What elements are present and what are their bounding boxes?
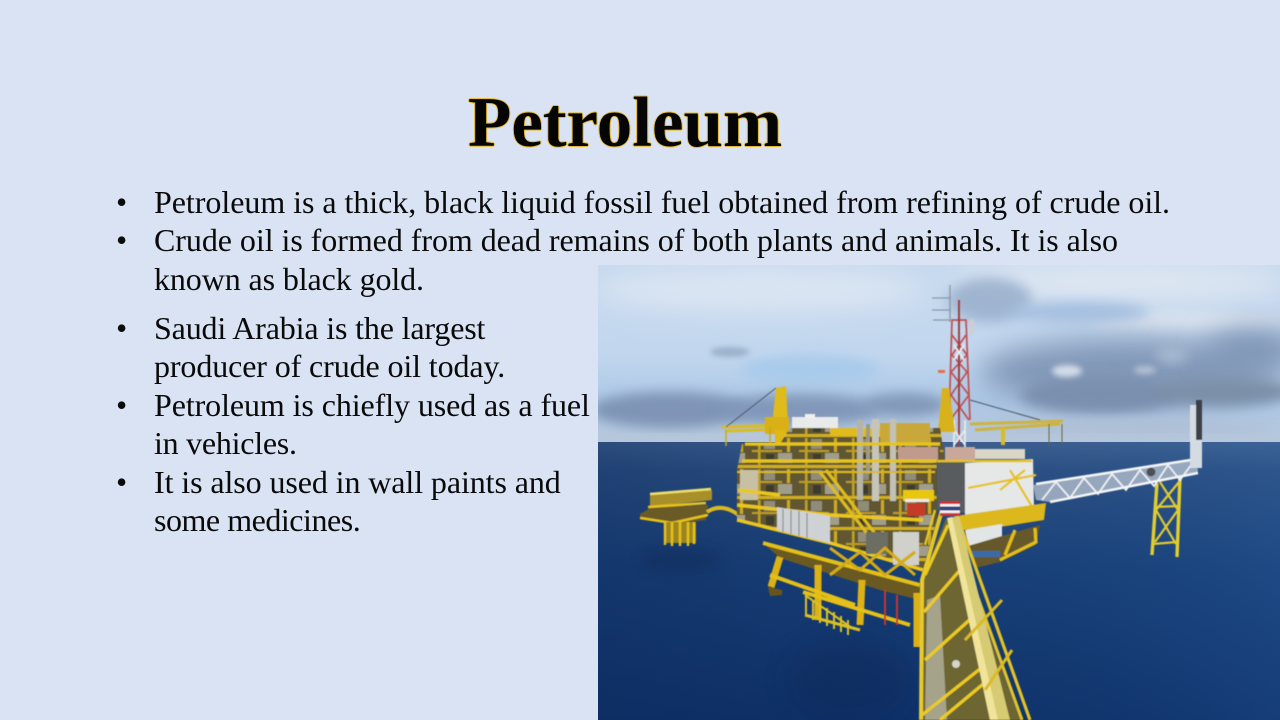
foreground walkway and pipe with Thai flag [920,501,1030,720]
bullet: vehicle fuel [116,387,590,461]
white module and right deck [937,447,1046,568]
small satellite platform [640,489,740,546]
communications tower [932,285,975,455]
bullet: definition: Petroleum is a thick, black liquid fossil fuel obtained from refining of crude oil. [154,184,1170,220]
bullet: Saudi Arabia [116,310,505,384]
sky and clouds [590,264,1280,443]
bullet: other uses: • [116,464,127,500]
bullet: crude oil origin: Crude oil is formed from dead remains of both plants and animals. It is also [154,222,1118,258]
bullet: other uses: some medicines. [154,502,360,538]
sea [598,442,1280,720]
main platform structure [737,414,945,570]
bullet: Saudi Arabia: producer of crude oil today. [154,348,505,384]
title: Petroleum [468,84,782,162]
bullet: crude oil origin: known as black gold. [154,261,424,297]
bullet: other uses: It is also used in wall paints and [154,464,561,500]
bullet: Saudi Arabia: • [116,310,127,346]
bullet: crude oil origin [116,222,1118,297]
bullet: definition: • [116,184,127,220]
bullet: crude oil origin: • [116,222,127,258]
bullet: vehicle fuel: • [116,387,127,423]
bullet: vehicle fuel: in vehicles. [154,425,297,461]
bullet: Saudi Arabia: Saudi Arabia is the largest [154,310,485,346]
flare boom and support [1033,400,1202,557]
cranes [721,385,1064,447]
platform legs and lower frame [763,543,920,647]
photo: offshore oil platform at sea [598,265,1280,720]
bullet: other uses [116,464,561,538]
bullet: vehicle fuel: Petroleum is chiefly used as a fuel [154,387,590,423]
